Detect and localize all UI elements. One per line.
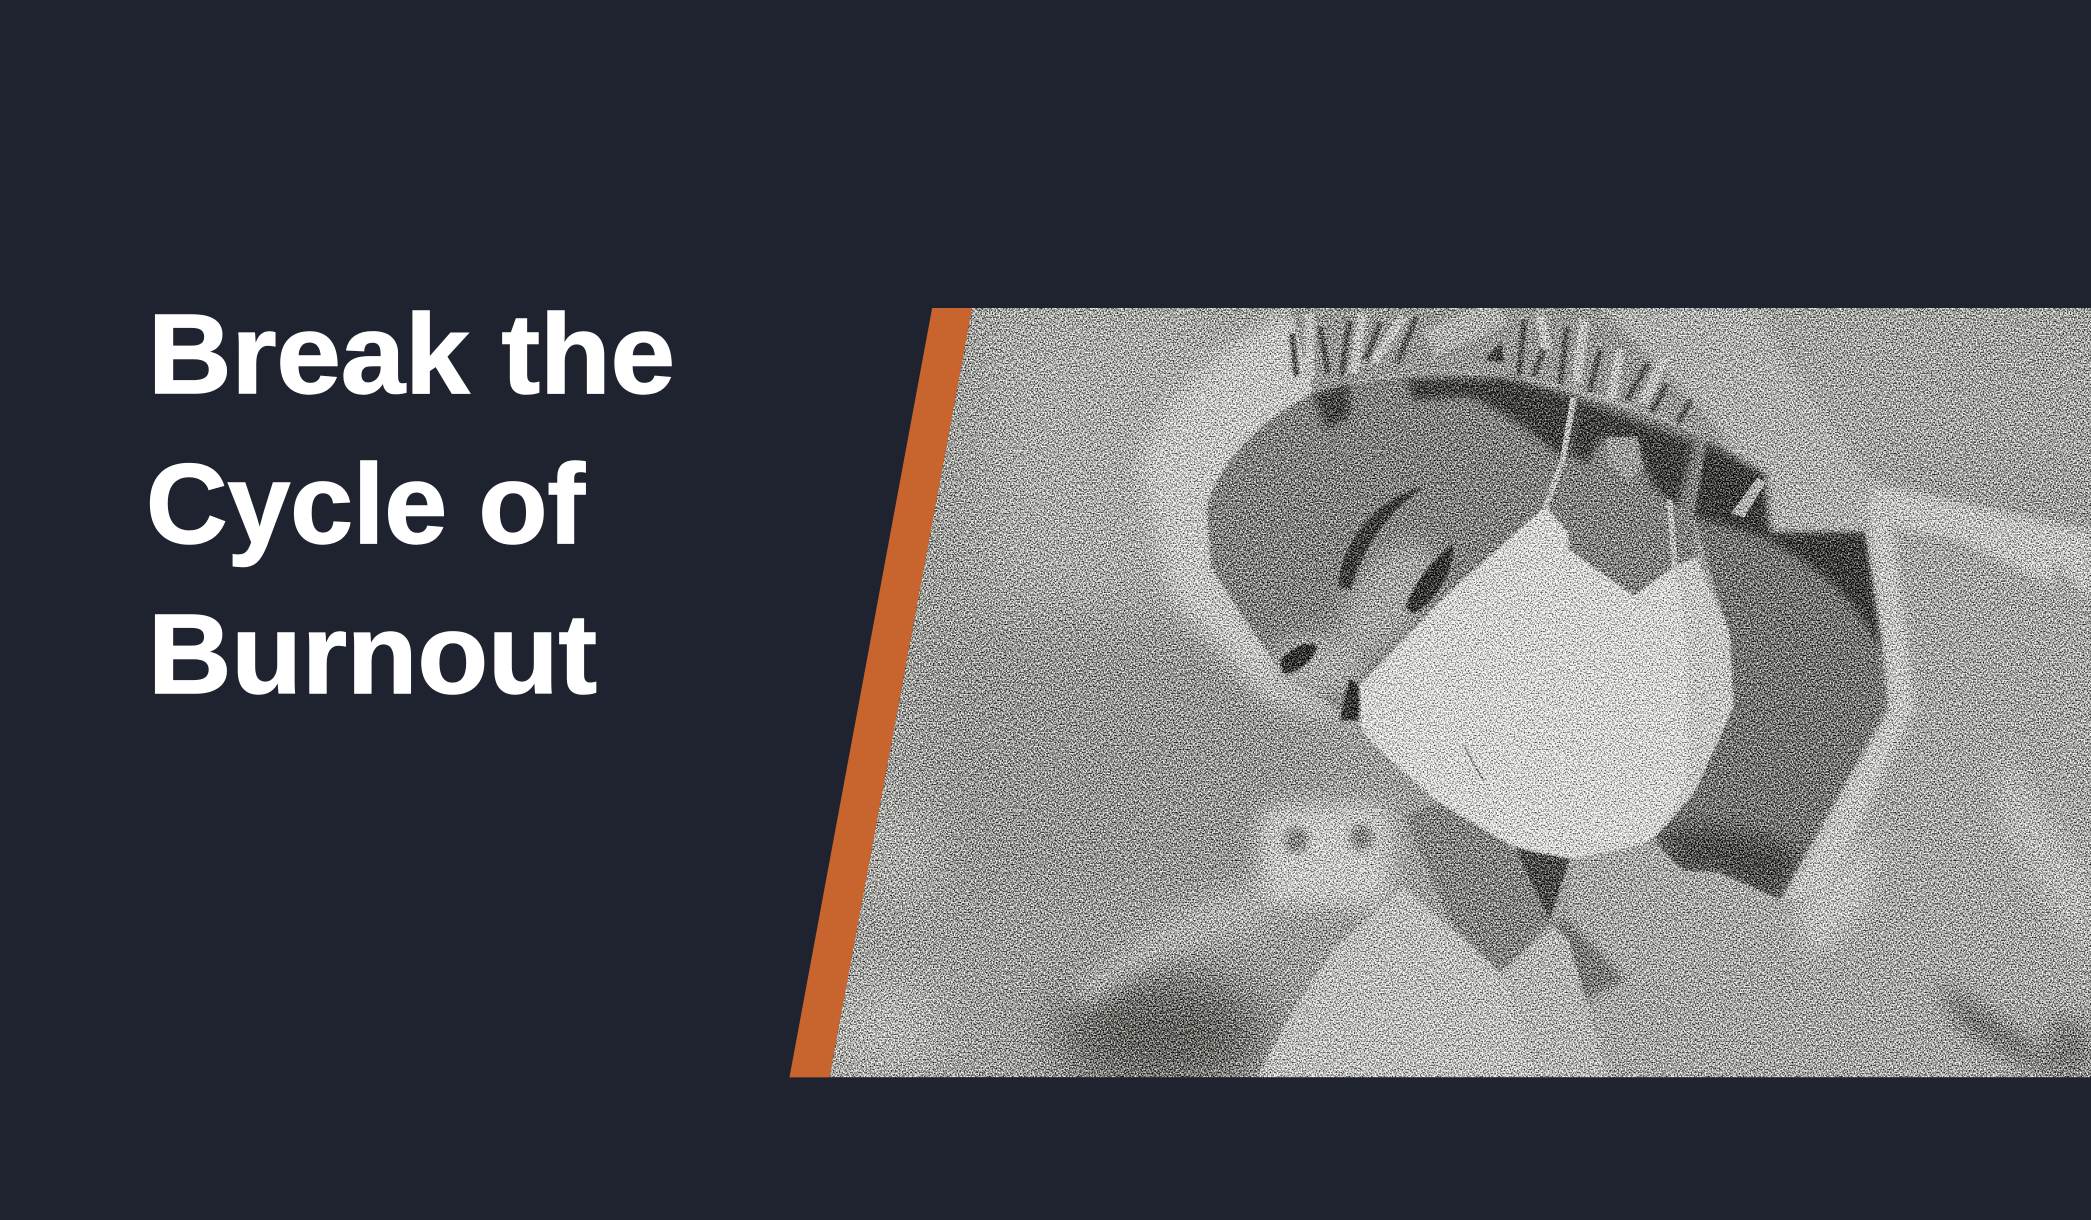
mask side panel — [1642, 556, 1735, 844]
hair shadow under cap — [1314, 379, 1694, 507]
photo background — [800, 308, 2091, 1077]
blurred object behind — [1260, 805, 1391, 907]
title: Break the Cycle of Burnout: Break the — [148, 291, 675, 417]
nostril and nose shadow — [1280, 644, 1318, 673]
mask straps — [1546, 397, 1675, 567]
face — [1207, 375, 1707, 713]
orange accent bar — [789, 308, 972, 1077]
grainy photo: masked surgeon — [800, 300, 2091, 1092]
eyebrow — [1339, 487, 1424, 589]
neck deep shadow — [1694, 440, 1883, 653]
hood halo — [1140, 308, 1347, 720]
surgical cap — [1291, 308, 1874, 536]
gown folds — [1794, 747, 2091, 1077]
gown collar and chest — [1568, 483, 2091, 1077]
mask front — [1359, 507, 1688, 860]
illustration: photo panel with orange accent — [790, 308, 2091, 1078]
neck in shadow — [1655, 490, 1889, 899]
eyelash — [1406, 544, 1453, 613]
title: Break the Cycle of Burnout: Burnout — [148, 591, 597, 717]
sleeve and lapels — [1258, 803, 1626, 1077]
title: Break the Cycle of Burnout: Cycle of — [146, 441, 585, 567]
